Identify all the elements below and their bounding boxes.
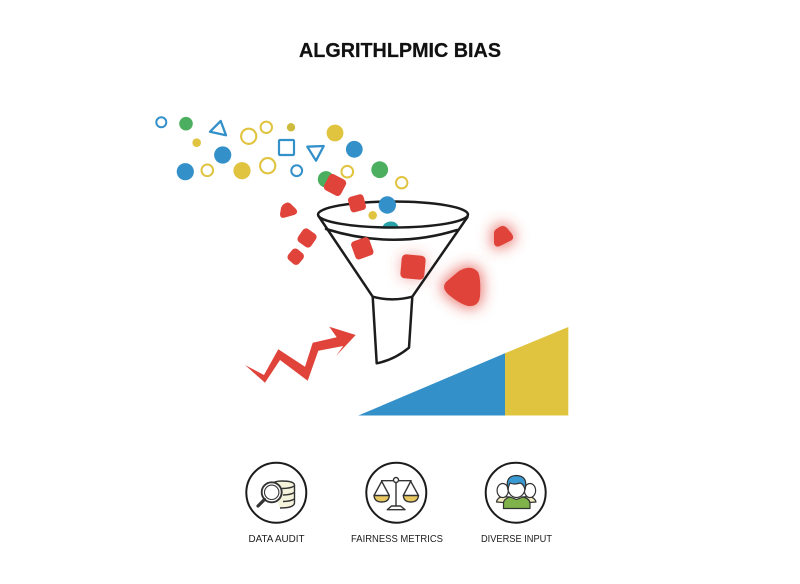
fairness metrics label: FAIRNESS METRICS <box>351 534 443 545</box>
funnel <box>318 202 468 363</box>
data audit icon <box>246 463 306 523</box>
blue and yellow wedge chart <box>358 327 568 416</box>
red jagged arrow <box>245 327 356 383</box>
scattered input data shapes <box>156 117 407 228</box>
title: ALGRITHLPMIC BIAS <box>299 39 501 62</box>
fairness metrics icon <box>366 463 426 523</box>
data audit label: DATA AUDIT <box>248 534 304 545</box>
red glow halos <box>401 226 513 306</box>
diverse input icon <box>486 463 546 523</box>
diverse input label: DIVERSE INPUT <box>481 534 552 545</box>
biased red shapes <box>280 173 513 306</box>
